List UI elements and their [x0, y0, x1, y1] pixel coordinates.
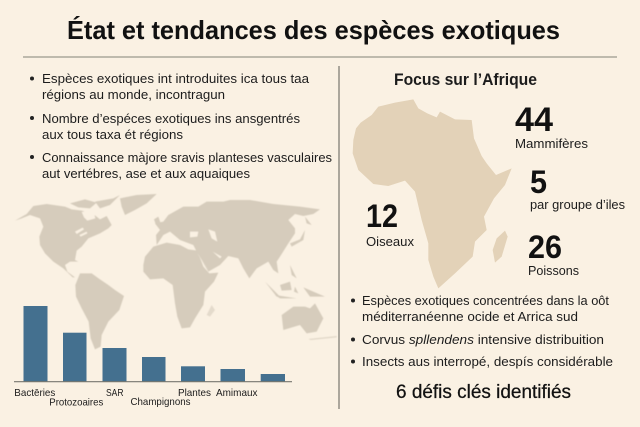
bar labels: Amimaux — [216, 387, 258, 399]
stat: 12 Oiseaux: Oiseaux — [366, 234, 414, 249]
bar: Plantes — [181, 366, 205, 382]
stat: 12 Oiseaux: 12 — [366, 198, 398, 234]
bar labels: Plantes — [178, 387, 211, 399]
bar labels: Protozoaires — [49, 396, 103, 408]
world map — [15, 194, 337, 349]
bar: unnamed last — [261, 374, 285, 382]
stat: 26 Poissons: Poissons — [528, 263, 579, 278]
bar labels — [14, 387, 258, 408]
callout: 6 défis clés identifiés: 6 défis clés identifiés — [396, 382, 571, 403]
heading: Focus sur l'Afrique: Focus sur l’Afrique — [394, 71, 537, 89]
panel: Africa bullet list: Espèces exotiques concentrées dans la oôt — [362, 293, 609, 308]
bar: Champignons — [142, 357, 166, 382]
bar: Animaux — [220, 369, 245, 382]
panel: global bullet list: Espèces exotiques int introduites ica tous taa — [42, 71, 310, 86]
stat: 44 Mammifères — [515, 101, 589, 151]
bar labels: SAR — [106, 387, 124, 399]
bar: SAR — [102, 348, 126, 382]
stat: 5 par groupe d'iles — [530, 164, 625, 212]
stat: 5 par groupe d'iles: par groupe d’iles — [530, 197, 625, 212]
panel: global bullet list: aut vertébres, ase et aux aquaiques — [42, 166, 250, 181]
stat: 44 Mammifères: 44 — [515, 101, 553, 139]
bar labels: Bactēries — [14, 387, 55, 399]
bar labels: Champignons — [130, 396, 190, 408]
stat: 26 Poissons: 26 — [528, 229, 562, 265]
panel: global bullet list: régions au monde, incontragun — [42, 87, 225, 102]
stat: 26 Poissons — [528, 229, 579, 278]
stat: 5 par groupe d'iles: 5 — [530, 164, 547, 200]
stat: 12 Oiseaux — [366, 198, 414, 249]
title: État et tendances des espèces exotiques — [67, 15, 560, 45]
bar: Bactéries — [24, 306, 48, 382]
map: Africa — [353, 99, 512, 288]
bar chart: species by taxon — [14, 306, 292, 408]
panel: global bullet list: aux tous taxa ét régions — [42, 127, 184, 142]
panel: global bullet list: Connaissance màjore sravis planteses vasculaires — [42, 150, 332, 165]
panel: global bullet list — [30, 71, 332, 181]
stat: 44 Mammifères: Mammifères — [515, 136, 589, 151]
panel: global bullet list: Nombre d’espéces exotiques ins ansgentrés — [42, 111, 301, 126]
panel: Africa bullet list: Corvus spllendens intensive distribuition — [362, 332, 604, 347]
bar: Protozoaires — [63, 333, 86, 382]
panel: Africa bullet list: Insects aus interropé, despís considérable — [362, 354, 613, 369]
panel: Africa bullet list — [351, 293, 613, 369]
panel: Africa bullet list: méditerranéenne ocide et Arrica sud — [362, 309, 578, 324]
